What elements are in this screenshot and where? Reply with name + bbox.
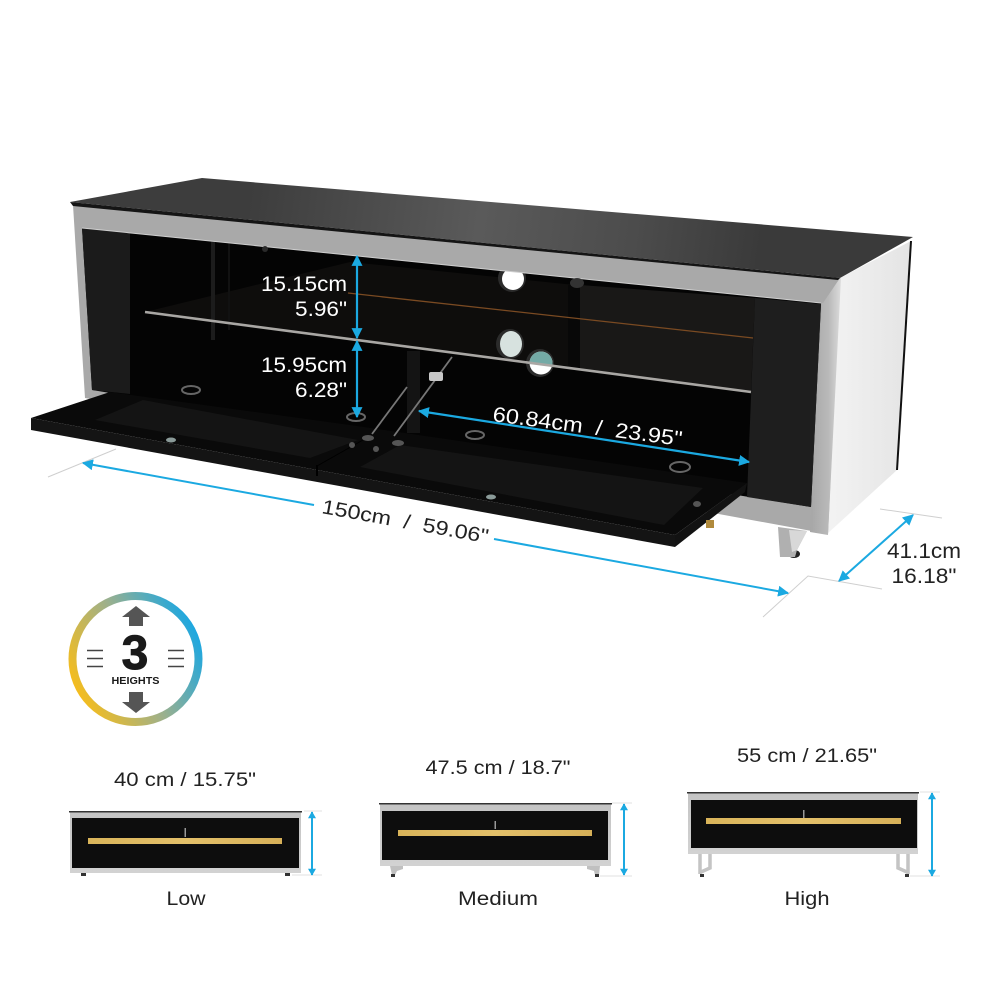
- gold bracket under door: [706, 520, 714, 528]
- interior back: [82, 228, 821, 507]
- interior width dimension: [419, 403, 749, 462]
- depth dimension: 16.18": [892, 565, 956, 588]
- top glass slab: [70, 178, 913, 278]
- glass shelf edge: [145, 312, 751, 392]
- 15.15cm dimension: [261, 256, 357, 338]
- wood strip behind shelf: [348, 293, 753, 338]
- 15.15cm dimension: 15.15cm: [261, 273, 347, 296]
- top frame re-draw to mask the upper hole: [73, 205, 840, 303]
- low height thumbnail: 40 cm / 15.75": [114, 770, 256, 791]
- right speaker panel: [747, 298, 821, 507]
- low height thumbnail: [69, 770, 322, 910]
- 15.15cm dimension: 5.96": [295, 298, 347, 321]
- interior width dimension: 60.84cm / 23.95": [491, 403, 684, 451]
- medium height thumbnail: 47.5 cm / 18.7": [426, 758, 570, 779]
- badge: 3 heights: [72, 596, 198, 722]
- high height thumbnail: 55 cm / 21.65": [737, 746, 877, 767]
- front frame: [73, 205, 840, 534]
- corner post: [810, 278, 841, 535]
- cable hole upper: [498, 264, 526, 292]
- overall width dimension: 150cm / 59.06": [320, 496, 490, 548]
- depth dimension: [839, 515, 961, 588]
- medium height thumbnail: [379, 758, 632, 910]
- 15.95cm dimension: 6.28": [295, 379, 347, 402]
- icon: up arrow: [122, 606, 150, 626]
- door struts: [372, 357, 452, 436]
- right door inset panel: [360, 445, 703, 525]
- left speaker panel: [82, 228, 130, 394]
- tv stand product illustration: [31, 178, 913, 558]
- badge: 3 heights: 3: [122, 627, 148, 680]
- icon: down arrow: [122, 692, 150, 713]
- depth dimension: 41.1cm: [887, 540, 961, 563]
- 15.95cm dimension: 15.95cm: [261, 354, 347, 377]
- rear foot and caster: [778, 527, 807, 558]
- overall width dimension: [48, 449, 942, 617]
- badge: 3 heights: HEIGHTS: [112, 676, 160, 687]
- small hinge bolts at back: [262, 246, 268, 252]
- cable hole middle: [496, 329, 524, 359]
- folded down door: [31, 386, 747, 547]
- high height thumbnail: [687, 746, 940, 910]
- left door inset panel: [95, 400, 358, 458]
- low height thumbnail: Low: [166, 889, 206, 910]
- high height thumbnail: High: [784, 889, 830, 910]
- door hardware: [166, 386, 701, 507]
- side panel: [827, 241, 911, 534]
- medium height thumbnail: Medium: [458, 889, 538, 910]
- cable hole lower: [526, 349, 554, 377]
- 15.95cm dimension: [261, 341, 357, 417]
